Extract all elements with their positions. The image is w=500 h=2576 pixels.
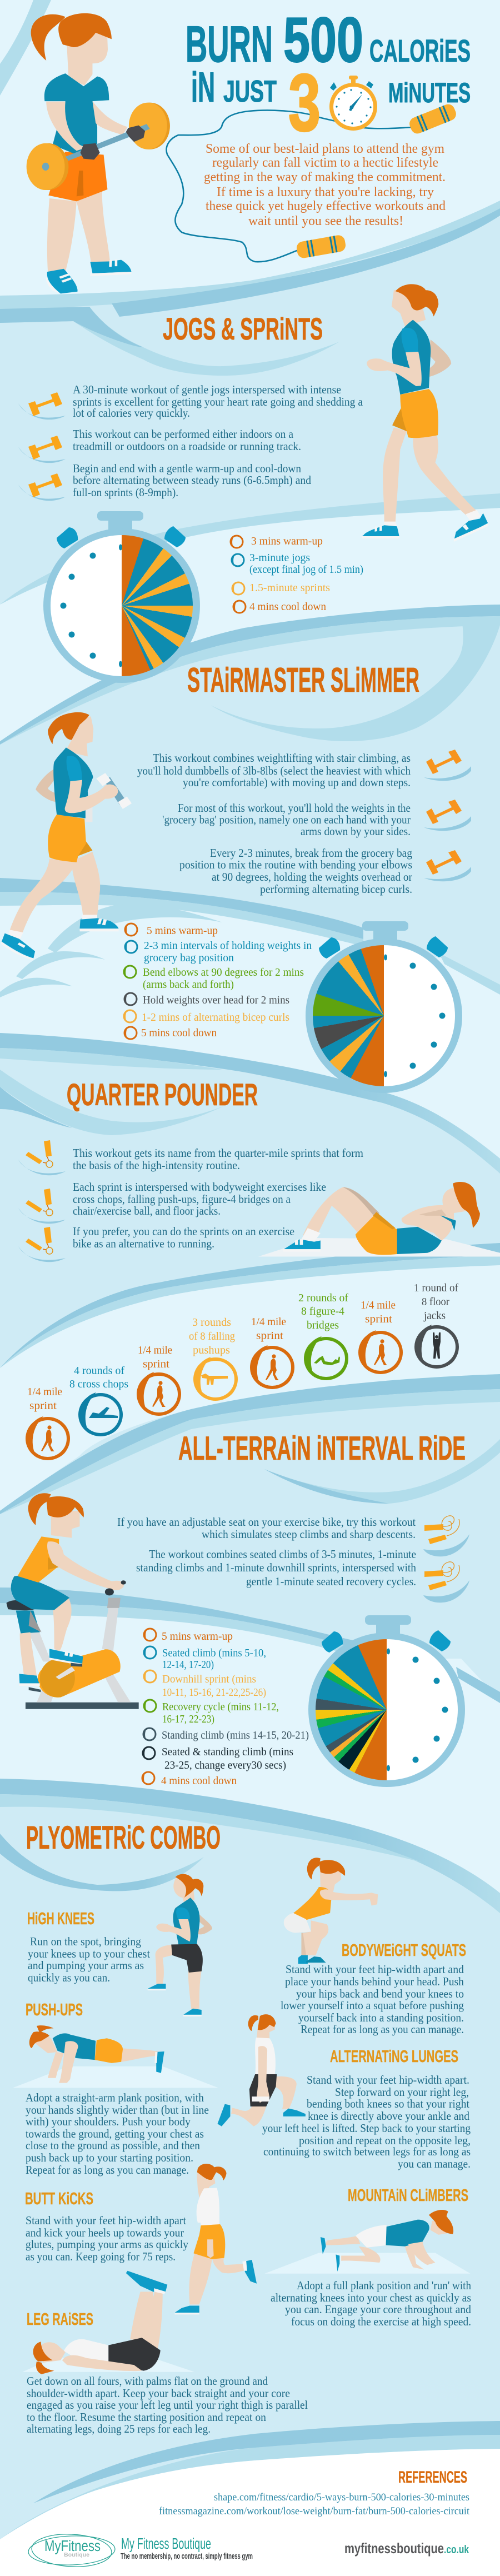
figure: woman doing sit-ups on a mat <box>258 1182 500 1256</box>
text: stairmaster description: 'grocery bag' position, namely one on each hand with your <box>162 813 411 826</box>
text: leg raises: alternating legs, doing 25 reps for each leg. <box>27 2422 211 2435</box>
text: leg raises: Get down on all fours, with palms flat on the ground and <box>27 2374 268 2388</box>
icon: rope handles 1 <box>18 1140 66 1175</box>
step 1: quarter mile sprint <box>27 1386 68 1459</box>
text: reference links <box>159 2492 470 2517</box>
background: quarter pounder title swoosh <box>0 1048 223 1135</box>
legend: stairmaster schedule: 2-3 min intervals of holding weights in <box>144 940 312 952</box>
text: jogs and sprints description: Begin and end with a gentle warm-up and cool-down <box>73 462 301 475</box>
heading: push-ups: PUSH-UPS <box>26 2000 83 2019</box>
chart: all-terrain stopwatch <box>308 1615 465 1787</box>
text: all-terrain description: which simulates steep climbs and sharp descents. <box>202 1527 416 1541</box>
step 6: figure-4 bridges: 8 figure-4 <box>301 1305 344 1317</box>
figure: jogging woman <box>362 284 488 542</box>
text: stairmaster description: This workout combines weightlifting with stair climbing, as <box>153 751 411 765</box>
step 8: floor jacks: 1 round of <box>414 1282 458 1294</box>
icon: stopwatch in title <box>329 76 377 131</box>
text: stairmaster description: arms down by your sides. <box>301 825 411 838</box>
step 4: falling pushups: 3 rounds <box>192 1316 231 1329</box>
icon: rope handles 3 <box>18 1227 66 1262</box>
text: quarter pounder description: If you prefer, you can do the sprints on an exercise <box>73 1225 294 1238</box>
legend: all-terrain schedule <box>142 1629 309 1787</box>
figure: woman with barbell <box>27 13 170 294</box>
text: bodyweight squats: lower yourself into a squat before pushing <box>281 1999 464 2012</box>
intro paragraph: Some of our best-laid plans to attend the gym <box>206 142 444 156</box>
figure: mountain climber on mat <box>264 2210 471 2274</box>
text: butt kicks: as you can. Keep going for 75 reps. <box>26 2250 176 2263</box>
legend: jogs and sprints schedule: 1.5-minute sprints <box>249 582 330 594</box>
text: stairmaster description: For most of this workout, you'll hold the weights in the <box>178 801 411 815</box>
icon: skipping rope 2 <box>423 1562 469 1602</box>
step 7: quarter mile sprint <box>360 1299 401 1372</box>
text: high knees: your knees up to your chest <box>28 1947 150 1960</box>
step 7: quarter mile sprint: 1/4 mile <box>361 1299 396 1311</box>
figure: bodyweight squat <box>284 1858 378 1964</box>
background: jogs and sprints title swoosh <box>0 307 339 376</box>
text: bodyweight squats: place your hands behind your head. Push <box>285 1975 464 1988</box>
text: website address: myfitnessboutique <box>344 2540 444 2557</box>
text: quarter pounder description: the basis of the high-intensity routine. <box>73 1159 240 1172</box>
background: interval light panel <box>0 1265 500 1511</box>
text: stairmaster description: you'll hold dumbbells of 3lb-8lbs (select the heaviest with which <box>137 764 411 777</box>
background: top-left corner swoosh <box>0 0 51 96</box>
text: butt kicks: and kick your heels up towards your <box>26 2226 184 2239</box>
text: alternating lunges: bending both knees so that your right <box>307 2097 469 2110</box>
main title: iN <box>191 64 215 111</box>
background: stairmaster upper wave band <box>0 878 500 997</box>
step 5: quarter mile sprint <box>251 1316 293 1387</box>
main title <box>186 5 471 111</box>
text: push-ups: push back up to your starting position. <box>26 2151 193 2164</box>
jump rope <box>167 102 458 262</box>
figure: alternating lunge <box>217 2014 306 2126</box>
intro paragraph <box>204 142 446 228</box>
text: high knees: and pumping your arms as <box>28 1959 144 1972</box>
background: stairmaster light panel <box>0 905 500 1159</box>
intro paragraph: getting in the way of making the commitment. <box>204 170 446 184</box>
step 2: cross chops: 8 cross chops <box>69 1378 128 1390</box>
text: butt kicks <box>26 2214 188 2263</box>
step 2: cross chops: 4 rounds of <box>74 1365 124 1377</box>
step 8: floor jacks: 8 floor <box>422 1296 449 1308</box>
logo: my fitness boutique: Boutique <box>64 2552 89 2558</box>
icon: barbell 2 <box>424 800 471 831</box>
text: high knees: quickly as you can. <box>28 1971 110 1984</box>
icon: dumbbell 1 <box>18 392 66 420</box>
heading: leg raises: LEG RAiSES <box>27 2309 93 2329</box>
step 1: quarter mile sprint: 1/4 mile <box>27 1386 62 1398</box>
text: alternating lunges: Stand with your feet hip-width apart. <box>307 2073 469 2086</box>
figure: high knees <box>148 1874 212 2016</box>
text: alternating lunges: knee is directly above your ankle and <box>308 2109 469 2123</box>
text: all-terrain description <box>117 1515 416 1588</box>
text: quarter pounder description: This workout gets its name from the quarter-mile sprints that form <box>73 1146 363 1160</box>
legend: all-terrain schedule: 12-14, 17-20) <box>162 1659 214 1671</box>
step 4: falling pushups: pushups <box>193 1344 230 1356</box>
step 8: floor jacks <box>414 1282 458 1367</box>
text: all-terrain description: The workout combines seated climbs of 3-5 minutes, 1-minute <box>149 1547 416 1561</box>
heading: high knees: HiGH KNEES <box>27 1909 94 1928</box>
text: reference links: shape.com/fitness/cardio/5-ways-burn-500-calories-30-minutes <box>214 2492 469 2503</box>
text: high knees <box>28 1935 150 1984</box>
text: alternating lunges <box>262 2073 471 2170</box>
background: stairmaster title swoosh <box>211 620 500 741</box>
figure: woman on exercise bike <box>6 1493 139 1709</box>
icon: dumbbell 3 <box>18 473 66 501</box>
legend: all-terrain schedule: 23-25, change every30 secs) <box>164 1759 286 1771</box>
text: jogs and sprints description: sprints is excellent for getting your heart rate going and shedding a <box>73 395 363 408</box>
text: butt kicks: Stand with your feet hip-width apart <box>26 2214 186 2227</box>
legend: stairmaster schedule: 5 mins warm-up <box>147 925 218 937</box>
text: leg raises: to the floor. Resume the starting position and repeat on <box>27 2410 266 2424</box>
icon: dumbbell 2 <box>18 436 66 463</box>
text: jogs and sprints description: before alternating between steady runs (6-6.5mph) and <box>73 473 311 487</box>
logo: my fitness boutique: MyFitness <box>44 2537 101 2554</box>
step 5: quarter mile sprint: 1/4 mile <box>251 1316 286 1328</box>
background: footer white panel <box>0 2449 500 2576</box>
legend: jogs and sprints schedule: 3 mins warm-up <box>251 535 323 547</box>
text: jogs and sprints description <box>73 383 363 499</box>
text: push-ups <box>26 2091 209 2176</box>
text: jogs and sprints description: This workout can be performed either indoors on a <box>73 427 294 441</box>
timeline: quarter pounder circuit <box>27 1282 458 1459</box>
legend: all-terrain schedule: Seated climb (mins 5-10, <box>162 1647 266 1659</box>
big number 3: 3 <box>288 57 321 148</box>
background: ride light panel <box>0 1615 500 1893</box>
section title: quarter pounder: QUARTER POUNDER <box>67 1077 258 1112</box>
text: push-ups: Repeat for as long as you can manage. <box>26 2163 189 2176</box>
legend: all-terrain schedule: 4 mins cool down <box>161 1775 237 1787</box>
text: push-ups: with) your shoulders. Push your body <box>26 2115 191 2128</box>
intro paragraph: If time is a luxury that you're lacking, try <box>217 185 434 199</box>
legend: stairmaster schedule: 1-2 mins of alternating bicep curls <box>142 1011 289 1024</box>
intro paragraph: regularly can fall victim to a hectic lifestyle <box>212 156 438 170</box>
legend: stairmaster schedule: grocery bag position <box>144 952 234 964</box>
chart: stairmaster stopwatch <box>306 921 462 1093</box>
text: stairmaster description <box>137 751 412 896</box>
icon: barbell 3 <box>424 850 471 881</box>
text: jogs and sprints description: full-on sprints (8-9mph). <box>73 486 178 499</box>
text: leg raises <box>27 2374 308 2435</box>
text: alternating lunges: you can manage. <box>398 2157 471 2170</box>
background: jogs legend wave band <box>0 493 500 745</box>
text: push-ups: towards the ground, getting your chest as <box>26 2127 204 2140</box>
step 3: quarter mile sprint <box>138 1344 179 1414</box>
text: mountain climbers: focus on doing the exercise at high speed. <box>291 2315 471 2328</box>
step 6: figure-4 bridges: bridges <box>307 1319 339 1331</box>
step 3: quarter mile sprint: 1/4 mile <box>138 1344 172 1356</box>
step 5: quarter mile sprint: sprint <box>256 1330 283 1342</box>
legend: stairmaster schedule: Bend elbows at 90 degrees for 2 mins <box>143 966 304 979</box>
background: stairmaster lower wave band <box>0 1033 500 1174</box>
legend: jogs and sprints schedule: 4 mins cool down <box>249 601 326 613</box>
text: stairmaster description: at 90 degrees, holding the weights overhead or <box>212 870 412 883</box>
section title: jogs and sprints: JOGS & SPRiNTS <box>163 311 323 346</box>
legend: all-terrain schedule: Downhill sprint (mins <box>162 1673 256 1685</box>
text: bodyweight squats: Repeat for as long as you can manage. <box>301 2023 464 2036</box>
background: hero light panel <box>0 0 500 296</box>
text: push-ups: close to the ground as possible, and then <box>26 2139 200 2152</box>
text: leg raises: engaged as you raise your left leg until your right thigh is parallel <box>27 2398 308 2412</box>
legend: jogs and sprints schedule: (except final jog of 1.5 min) <box>249 563 363 576</box>
section title: plyometric combo: PLYOMETRiC COMBO <box>26 1820 221 1856</box>
text: brand name and tagline: The no membership, no contract, simply fitness gym <box>121 2552 253 2561</box>
text: jogs and sprints description: lot of calories very quickly. <box>73 406 190 420</box>
text: quarter pounder description: Each sprint is interspersed with bodyweight exercises like <box>73 1180 326 1194</box>
text: butt kicks: glutes, pumping your arms as quickly <box>26 2238 188 2251</box>
heading: butt kicks: BUTT KiCKS <box>25 2189 93 2208</box>
text: alternating lunges: Step forward on your right leg, <box>335 2085 469 2099</box>
text: brand name and tagline: My Fitness Boutique <box>121 2535 211 2552</box>
logo: my fitness boutique <box>28 2532 116 2569</box>
figure: push-up on mat <box>13 2025 218 2088</box>
background: interval bottom wave band <box>0 1374 500 1514</box>
legend: all-terrain schedule: Seated & standing climb (mins <box>162 1746 293 1758</box>
text: bodyweight squats: yourself back into a standing position. <box>298 2011 464 2024</box>
background: footer wave band <box>0 2421 500 2539</box>
step 8: floor jacks: jacks <box>423 1310 446 1322</box>
background: ride wave bands <box>0 1587 500 1913</box>
text: alternating lunges: position and repeat on the opposite leg, <box>299 2134 471 2147</box>
legend: stairmaster schedule: Hold weights over head for 2 mins <box>143 994 289 1006</box>
step 6: figure-4 bridges <box>298 1292 348 1379</box>
intro paragraph: wait until you see the results! <box>248 214 403 228</box>
text: mountain climbers: Adopt a full plank position and 'run' with <box>297 2279 471 2292</box>
text: high knees: Run on the spot, bringing <box>30 1935 141 1948</box>
legend: all-terrain schedule: 10-11, 15-16, 21-22,25-26) <box>162 1686 266 1699</box>
step 4: falling pushups <box>189 1316 236 1399</box>
text: stairmaster description: you're comfortable) with moving up and down steps. <box>183 776 411 789</box>
background: all-terrain title swoosh <box>264 1439 500 1504</box>
text: mountain climbers <box>271 2279 471 2328</box>
legend: stairmaster schedule: (arms back and forth) <box>143 979 234 991</box>
icon: barbell 1 <box>424 750 471 781</box>
text: bodyweight squats: your hips back and bend your knees to <box>296 1987 464 2000</box>
text: all-terrain description: If you have an adjustable seat on your exercise bike, try this workout <box>117 1515 416 1529</box>
text: stairmaster description: position to mix the routine with bending your elbows <box>179 858 412 871</box>
text: jogs and sprints description: treadmill or outdoors on a roadside or running track. <box>73 440 301 453</box>
legend: jogs and sprints schedule <box>231 535 363 613</box>
text: brand name and tagline <box>121 2535 253 2561</box>
figure: butt kicks <box>175 2164 257 2314</box>
text: bodyweight squats: Stand with your feet hip-width apart and <box>286 1963 464 1976</box>
text: leg raises: shoulder-width apart. Keep your back straight and your core <box>27 2387 290 2400</box>
figure: leg raises on mat <box>22 2271 194 2374</box>
text: mountain climbers: alternating knees into your chest as quickly as <box>271 2291 471 2304</box>
icon: skipping rope 1 <box>423 1516 469 1556</box>
legend: all-terrain schedule: Recovery cycle (mins 11-12, <box>162 1701 279 1713</box>
step 2: cross chops <box>69 1365 128 1435</box>
legend: stairmaster schedule <box>124 923 312 1039</box>
text: quarter pounder description: chair/exercise ball, and floor jacks. <box>73 1204 221 1217</box>
background: plyometric title swoosh <box>0 1834 204 1891</box>
text: stairmaster description: Every 2-3 minutes, break from the grocery bag <box>210 846 412 860</box>
step 1: quarter mile sprint: sprint <box>29 1400 57 1412</box>
chart: jogs and sprints stopwatch <box>43 511 200 683</box>
text: all-terrain description: standing climbs and 1-minute downhill sprints, interspersed with <box>136 1561 416 1574</box>
legend: all-terrain schedule: 5 mins warm-up <box>162 1630 233 1643</box>
legend: stairmaster schedule: 5 mins cool down <box>141 1027 217 1039</box>
text: all-terrain description: gentle 1-minute seated recovery cycles. <box>246 1575 416 1588</box>
step 6: figure-4 bridges: 2 rounds of <box>298 1292 348 1304</box>
figure: stair climbing woman <box>1 712 132 960</box>
background: jogs legend light panel <box>0 493 500 741</box>
text: push-ups: your hands slightly wider than (but in line <box>26 2103 209 2116</box>
text: bodyweight squats <box>281 1963 464 2036</box>
text: stairmaster description: performing alternating bicep curls. <box>260 882 412 896</box>
main title: BURN <box>186 16 273 73</box>
background: interval top wave band <box>0 1243 500 1368</box>
text: alternating lunges: your left heel is lifted. Step back to your starting <box>262 2121 471 2135</box>
text: quarter pounder description: cross chops, falling push-ups, figure-4 bridges on a <box>73 1192 291 1206</box>
icon: rope handles 2 <box>18 1189 66 1224</box>
step 3: quarter mile sprint: sprint <box>143 1358 169 1370</box>
text: push-ups: Adopt a straight-arm plank position, with <box>26 2091 204 2104</box>
text: mountain climbers: you can. Engage your core throughout and <box>285 2303 471 2316</box>
step 7: quarter mile sprint: sprint <box>365 1313 392 1325</box>
text: website address: .co.uk <box>444 2544 469 2556</box>
legend: all-terrain schedule: Standing climb (mins 14-15, 20-21) <box>162 1729 309 1741</box>
legend: jogs and sprints schedule: 3-minute jogs <box>249 552 310 564</box>
background: hero wave band <box>0 201 500 317</box>
text: reference links: fitnessmagazine.com/workout/lose-weight/burn-fat/burn-500-calories-circuit <box>159 2505 470 2517</box>
intro paragraph: these quick yet hugely effective workouts and <box>206 199 446 213</box>
text: quarter pounder description: bike as an alternative to running. <box>73 1237 214 1250</box>
text: jogs and sprints description: A 30-minute workout of gentle jogs interspersed with intense <box>73 383 341 396</box>
main title: JUST <box>223 74 277 108</box>
legend: all-terrain schedule: 16-17, 22-23) <box>162 1713 214 1725</box>
step 4: falling pushups: of 8 falling <box>189 1330 235 1342</box>
text: alternating lunges: continuing to switch between legs for as long as <box>263 2145 471 2158</box>
text: quarter pounder description <box>73 1146 363 1250</box>
main title: 500 <box>283 5 363 76</box>
